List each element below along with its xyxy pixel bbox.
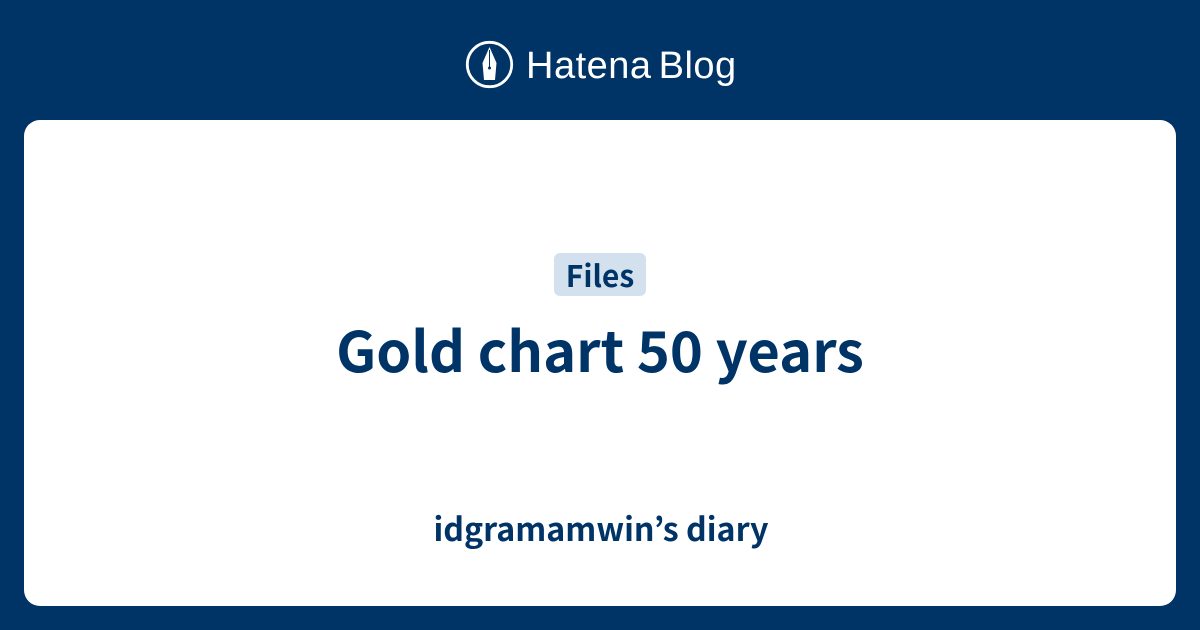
title: Gold chart 50 years <box>336 308 864 389</box>
category badge: Files: Files <box>566 252 634 296</box>
icon: fountain pen nib <box>466 40 514 88</box>
logo wordmark: Hatena Blog <box>526 45 737 87</box>
panel: white card <box>24 120 1176 606</box>
logo: Hatena Blog <box>466 40 737 88</box>
blog name: idgramamwin’s diary <box>433 505 769 551</box>
